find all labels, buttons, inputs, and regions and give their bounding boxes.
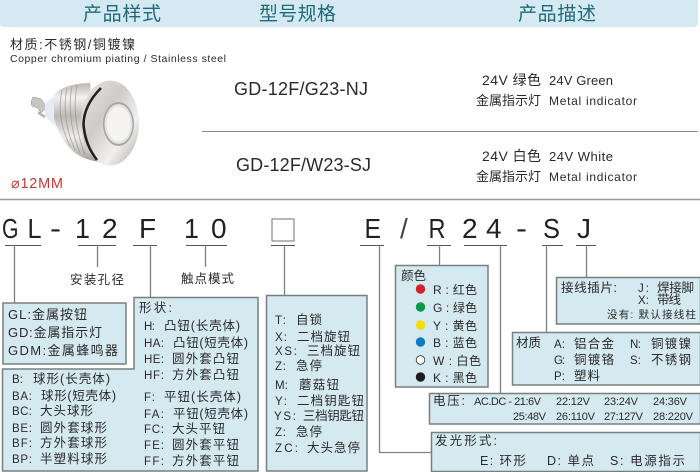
diameter label: ⌀12MM xyxy=(11,176,63,192)
panel: shape: 方外套凸钮 xyxy=(172,367,239,382)
icon: white dot xyxy=(416,356,425,364)
panel: material: G: xyxy=(554,355,565,367)
panel: shape: 形状: xyxy=(139,301,172,315)
panel: shape: HA: xyxy=(144,338,164,350)
panel: shape: 凸钮(短壳体) xyxy=(173,335,248,350)
panel: shape: 球形(短壳体) xyxy=(41,389,116,403)
panel: shape: BC: xyxy=(12,406,32,418)
panel: switch type: 二档旋钮 xyxy=(297,329,350,344)
panel: shape: B: xyxy=(12,374,23,386)
panel: series: GD:金属指示灯 xyxy=(8,325,102,340)
part number code: 4 xyxy=(486,213,502,244)
panel: illumination type: E: 环形 xyxy=(480,454,526,468)
panel: voltage: 22:12V xyxy=(556,396,591,408)
panel: material: 铜镀镍 xyxy=(651,336,691,351)
panel: switch type: ZC: xyxy=(275,443,298,455)
panel: voltage: 电压: xyxy=(433,394,465,408)
panel: illumination type: 发光形式: xyxy=(435,433,497,448)
panel: shape: H: xyxy=(144,321,155,333)
model number: green: GD-12F/G23-NJ xyxy=(234,79,368,99)
panel: material: N: xyxy=(630,339,641,351)
part number code: 2 xyxy=(102,213,118,244)
description: white indicator: 24V White xyxy=(549,149,613,164)
panel: voltage: 23:24V xyxy=(604,396,639,408)
panel: series xyxy=(3,303,126,364)
panel: lamp colour: K : 黑色 xyxy=(433,371,477,385)
panel: switch type: XS: xyxy=(275,346,297,358)
heading: model spec: 型号规格 xyxy=(259,3,336,25)
panel: terminal xyxy=(556,278,700,324)
panel: shape: F: xyxy=(144,392,155,404)
material text xyxy=(10,37,226,65)
panel: shape: BP: xyxy=(12,454,32,466)
panel: shape: FF: xyxy=(144,456,164,468)
panel: lamp colour: Y : 黄色 xyxy=(433,319,477,333)
panel: terminal: 接线插片: xyxy=(561,280,617,295)
panel: lamp colour xyxy=(396,266,488,387)
panel: lamp colour: R : 红色 xyxy=(433,282,477,297)
part number code: J xyxy=(577,213,591,244)
panel: terminal: 带线 xyxy=(657,293,681,307)
panel: voltage: 28:220V xyxy=(653,411,694,423)
panel: shape: 大头球形 xyxy=(40,404,93,418)
panel: shape: FE: xyxy=(144,440,164,452)
panel: voltage xyxy=(430,394,700,424)
description: white indicator xyxy=(476,148,637,184)
panel: shape: FC: xyxy=(144,424,164,436)
panel: shape: HF: xyxy=(144,370,164,382)
panel: series: GL:金属按钮 xyxy=(8,307,87,322)
panel: material: S: xyxy=(630,355,641,367)
material text: Copper chromium piating / Stainless steel xyxy=(10,53,226,65)
panel: switch type: 三档旋钮 xyxy=(307,343,360,358)
panel: voltage: 25:48V xyxy=(513,411,547,423)
header band xyxy=(0,0,698,27)
panel: material: 材质 xyxy=(516,336,541,350)
divider between rows xyxy=(202,130,698,132)
panel: terminal: J: xyxy=(638,283,649,295)
part number code: E xyxy=(364,213,381,244)
icon: black dot xyxy=(416,372,425,382)
panel: switch type: 急停 xyxy=(296,358,322,373)
panel: material: P: xyxy=(554,371,565,383)
panel: material: 塑料 xyxy=(574,368,600,383)
panel: shape xyxy=(2,298,258,471)
panel: shape: 圆外套球形 xyxy=(40,420,107,435)
description: green indicator: Metal indicator xyxy=(549,94,637,108)
part number code: 1 xyxy=(75,213,90,244)
panel: shape: 凸钮(长壳体) xyxy=(164,318,240,333)
label: contact mode: 触点模式 xyxy=(181,272,234,286)
panel: lamp colour: B : 蓝色 xyxy=(433,336,477,350)
description: white indicator: Metal indicator xyxy=(549,170,637,184)
panel: lamp colour: 颜色 xyxy=(401,268,426,283)
panel: switch type: 三档钥匙钮 xyxy=(303,408,364,423)
panel: shape: BF: xyxy=(12,438,32,450)
panel: shape: 半塑料球形 xyxy=(40,451,107,466)
panel: voltage: 27:127V xyxy=(604,411,644,423)
icon: yellow dot xyxy=(416,320,425,330)
panel: shape: 方外套平钮 xyxy=(172,453,239,468)
panel: shape: BA: xyxy=(12,391,32,403)
part number code: 0 xyxy=(211,213,227,244)
part number code: F xyxy=(139,213,156,244)
panel: terminal: 焊接脚 xyxy=(657,280,694,295)
label: mounting hole: 安装孔径 xyxy=(70,272,124,287)
part number code: G xyxy=(2,213,18,244)
panel: switch type: 大头急停 xyxy=(307,440,360,455)
description: green indicator: 24V Green xyxy=(549,73,613,88)
description: white indicator: 金属指示灯 xyxy=(476,169,541,184)
part number code: 1 xyxy=(184,213,199,244)
panel: terminal: 没有: 默认接线柱 xyxy=(607,308,696,321)
part number code: - xyxy=(50,213,61,244)
panel: voltage: AC.DC - 21:6V xyxy=(474,396,542,408)
icon: blue dot xyxy=(416,337,425,347)
icon: red dot xyxy=(416,284,425,294)
heading: product style: 产品样式 xyxy=(83,3,161,25)
part number code: R xyxy=(428,213,446,244)
panel: material xyxy=(512,332,700,385)
panel: illumination type: S: 电源指示 xyxy=(610,453,685,468)
code underlines and connectors xyxy=(5,245,596,452)
part number code: 2 xyxy=(462,213,478,244)
panel: material: 铜镀铬 xyxy=(574,352,614,367)
panel: shape: 圆外套凸钮 xyxy=(172,351,239,366)
panel: shape: HE: xyxy=(144,354,164,366)
panel: material: 不锈钢 xyxy=(651,352,691,367)
description: white indicator: 24V 白色 xyxy=(482,148,541,164)
panel: voltage: 26:110V xyxy=(556,411,596,423)
panel: shape: 球形(长壳体) xyxy=(33,372,110,386)
panel: shape: 平钮(短壳体) xyxy=(173,406,248,421)
panel: material: 铝合金 xyxy=(574,336,614,351)
material text: 材质:不锈钢/铜镀镍 xyxy=(10,37,135,52)
panel: shape: 圆外套平钮 xyxy=(172,437,239,452)
panel: switch type: 蘑菇钮 xyxy=(299,377,339,392)
panel: switch type: 自锁 xyxy=(296,312,322,327)
description: green indicator: 金属指示灯 xyxy=(476,93,541,108)
panel: switch type: 急停 xyxy=(296,424,322,439)
panel: lamp colour: W : 白色 xyxy=(433,353,481,368)
part number code: - xyxy=(516,213,527,244)
panel: series: GDM:金属蜂鸣器 xyxy=(8,343,118,358)
panel: switch type: 二档钥匙钮 xyxy=(297,393,364,408)
part number code: S xyxy=(543,213,560,244)
panel: switch type: Z: xyxy=(275,427,286,439)
panel: illumination type xyxy=(432,432,700,472)
panel: switch type: YS: xyxy=(274,411,296,423)
part number code: L xyxy=(28,213,42,244)
panel: switch type: T: xyxy=(275,315,286,327)
icon: metal push button photo xyxy=(31,80,139,166)
description: green indicator: 24V 绿色 xyxy=(482,72,541,88)
panel: switch type: X: xyxy=(275,332,287,344)
panel: switch type xyxy=(266,296,367,471)
part number code: / xyxy=(400,213,408,244)
icon: green dot xyxy=(416,302,425,312)
heading: product description: 产品描述 xyxy=(518,3,596,25)
panel: lamp colour: G : 绿色 xyxy=(433,300,477,315)
description: green indicator xyxy=(476,72,637,108)
panel: voltage: 24:36V xyxy=(653,396,688,408)
panel: terminal: X: xyxy=(638,295,649,307)
panel: shape: FA: xyxy=(144,409,164,421)
panel: switch type: Y: xyxy=(275,396,287,408)
part number code xyxy=(2,213,591,244)
panel: material: A: xyxy=(554,339,565,351)
panel: shape: BE: xyxy=(12,423,32,435)
panel: shape: 大头平钮 xyxy=(172,421,225,436)
panel: illumination type: D: 单点 xyxy=(547,454,594,468)
model number: white: GD-12F/W23-SJ xyxy=(236,155,371,175)
panel: shape: 方外套球形 xyxy=(40,435,107,450)
section divider xyxy=(0,198,700,200)
panel: switch type: Z: xyxy=(275,361,286,373)
panel: switch type: M: xyxy=(275,380,288,392)
panel: shape: 平钮(长壳体) xyxy=(164,389,241,404)
